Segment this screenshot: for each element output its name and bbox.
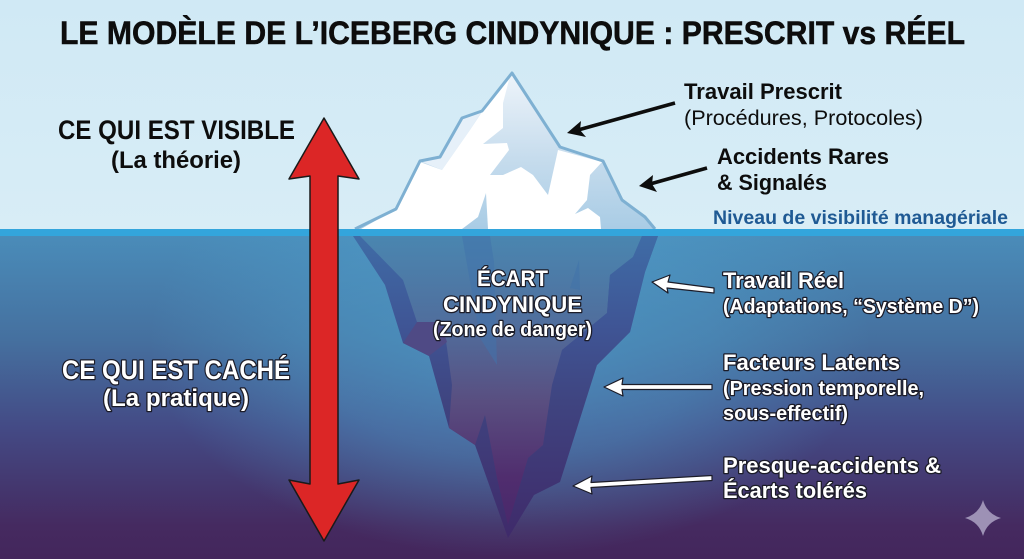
icon: sparkle	[965, 500, 1001, 536]
snow highlights	[361, 76, 602, 229]
label: near misses	[723, 453, 941, 503]
title: LE MODÈLE DE L’ICEBERG CINDYNIQUE : PRESCRIT vs RÉEL	[60, 15, 965, 51]
water line	[0, 229, 1024, 236]
label: latent factors: sous-effectif)	[723, 402, 848, 425]
double arrow: visible to hidden	[289, 118, 359, 541]
sky background	[0, 0, 1024, 232]
arrow: prescribed work	[567, 103, 675, 137]
label: cindynic gap	[433, 266, 592, 341]
arrow: near misses	[573, 476, 712, 494]
label: visible: (La théorie)	[111, 147, 241, 174]
label: real work	[723, 268, 979, 318]
arrow: latent factors	[604, 378, 712, 396]
label: rare accidents: Accidents Rares	[717, 144, 889, 169]
ocean background	[0, 232, 1024, 559]
label: near misses: Presque-accidents &	[723, 453, 941, 478]
label: visible: CE QUI EST VISIBLE	[58, 115, 295, 145]
label: real work: Travail Réel	[723, 268, 844, 293]
label: cindynic gap: CINDYNIQUE	[443, 292, 582, 317]
label: real work: (Adaptations, “Système D”)	[723, 296, 979, 318]
label: prescribed work	[684, 79, 923, 130]
label: latent factors: (Pression temporelle,	[723, 377, 924, 400]
label: rare accidents	[717, 144, 889, 195]
arrow: real work	[652, 275, 714, 293]
iceberg: visible tip	[355, 73, 655, 229]
arrow: rare accidents	[639, 168, 707, 192]
label: management visibility level: Niveau de visibilité managériale	[713, 207, 1008, 229]
label: prescribed work: Travail Prescrit	[684, 79, 842, 104]
label: cindynic gap: (Zone de danger)	[433, 319, 592, 341]
label: rare accidents: & Signalés	[717, 170, 827, 195]
pale left facet	[420, 111, 482, 170]
label: hidden	[62, 355, 290, 412]
label: hidden: (La pratique)	[103, 385, 249, 412]
label: prescribed work: (Procédures, Protocoles)	[684, 106, 923, 130]
label: near misses: Écarts tolérés	[723, 478, 867, 503]
label: cindynic gap: ÉCART	[477, 266, 548, 291]
iceberg outline	[355, 73, 655, 229]
label: hidden: CE QUI EST CACHÉ	[62, 355, 290, 385]
label: visible	[58, 115, 295, 174]
label: latent factors: Facteurs Latents	[723, 350, 900, 375]
label: latent factors	[723, 350, 924, 425]
iceberg: submerged part	[353, 236, 658, 538]
